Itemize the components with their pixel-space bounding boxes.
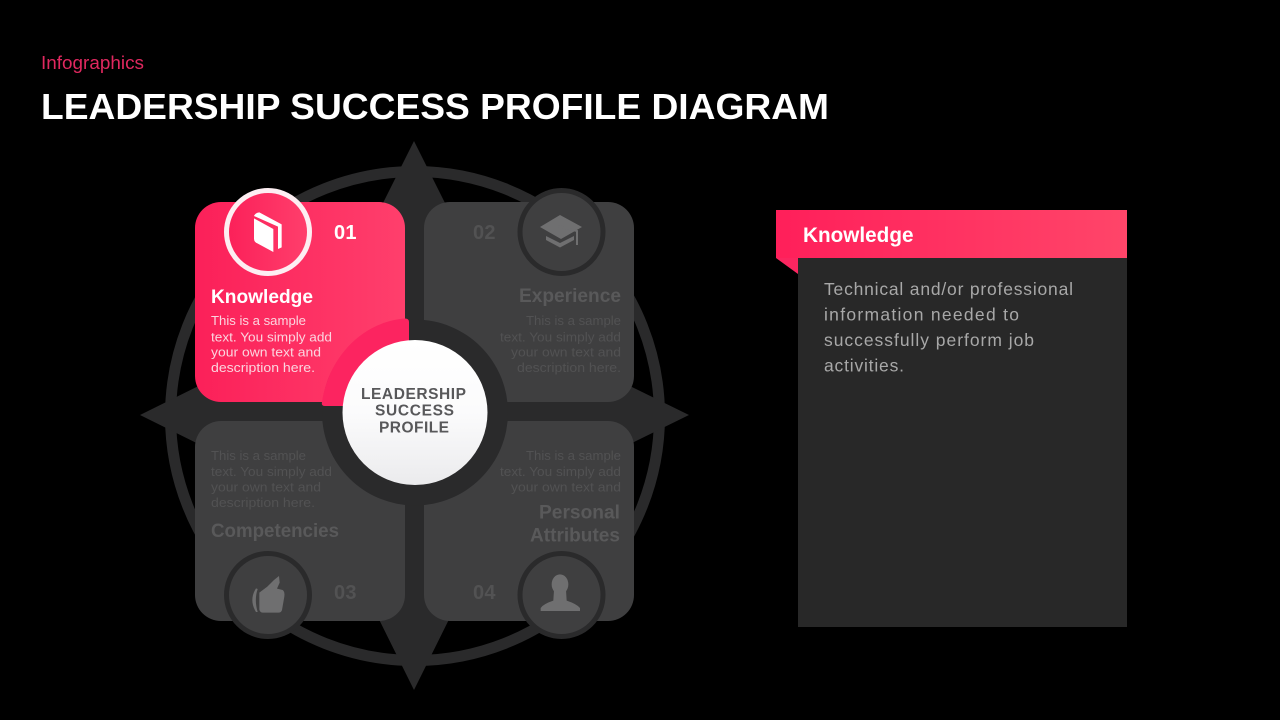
active quadrant highlight (322, 318, 409, 406)
text: Personal Attributes description (500, 448, 621, 494)
panel: Competencies card (195, 421, 405, 636)
diagram (140, 141, 689, 690)
icon: person in circle (520, 554, 603, 636)
text: Experience description: description here. (517, 360, 621, 375)
heading: Competencies: Competencies (211, 521, 339, 542)
text: Knowledge description: text. You simply add (211, 330, 332, 344)
heading: Experience: Experience (519, 286, 621, 307)
hub label: LEADERSHIP (361, 386, 466, 403)
number 04: 04 (473, 582, 496, 604)
heading: Knowledge: Knowledge (211, 287, 313, 308)
text: Experience description: your own text and (511, 344, 621, 360)
callout fold (776, 258, 798, 274)
text: Competencies description: This is a sample (211, 448, 306, 463)
text: Knowledge description (211, 313, 332, 375)
callout body (798, 258, 1127, 627)
heading: Personal Attributes: Personal (539, 502, 620, 524)
title: LEADERSHIP SUCCESS PROFILE DIAGRAM (41, 86, 829, 127)
panel: Knowledge card (195, 190, 405, 402)
hub label: PROFILE (379, 420, 449, 437)
text: Competencies description: text. You simply add (211, 464, 332, 479)
eyebrow: Infographics: Infographics (41, 52, 144, 73)
text: Competencies description (211, 448, 332, 510)
text: Personal Attributes description: your own text and (511, 480, 621, 494)
text: Personal Attributes description: This is a sample (526, 448, 621, 463)
outer ring (170, 172, 660, 660)
callout text: Technical and/or professional (824, 279, 1073, 299)
compass star (140, 141, 689, 690)
callout text (824, 279, 1073, 376)
text: Experience description (500, 313, 621, 375)
number 03: 03 (334, 582, 356, 604)
hub label (361, 386, 466, 437)
text: Competencies description: description here. (211, 495, 315, 510)
callout heading: Knowledge (803, 224, 914, 247)
callout text: successfully perform job (824, 330, 1034, 350)
panel: detail callout (776, 210, 1127, 627)
heading: Personal Attributes (530, 502, 620, 546)
text: Experience description: text. You simply add (500, 330, 621, 344)
callout header (776, 210, 1127, 258)
panel: Personal Attributes card (424, 421, 634, 636)
text: Competencies description: your own text and (211, 480, 321, 494)
text: Knowledge description: description here. (211, 360, 315, 375)
number 02: 02 (473, 222, 496, 244)
callout text: information needed to (824, 305, 1019, 325)
number 01: 01 (334, 222, 356, 244)
text: Knowledge description: your own text and (211, 344, 321, 360)
callout text: activities. (824, 356, 904, 376)
text: Personal Attributes description: text. You simply add (500, 464, 621, 479)
icon: book in circle (226, 190, 310, 274)
icon: thumbs up in circle (226, 554, 310, 636)
text: Knowledge description: This is a sample (211, 313, 306, 328)
hub label: SUCCESS (375, 403, 454, 420)
hub: center circle with label (342, 340, 488, 485)
heading: Personal Attributes: Attributes (530, 526, 620, 546)
text: Experience description: This is a sample (526, 313, 621, 328)
panel: Experience card (424, 190, 634, 402)
hub ring (322, 320, 508, 506)
icon: graduation cap in circle (520, 190, 603, 274)
